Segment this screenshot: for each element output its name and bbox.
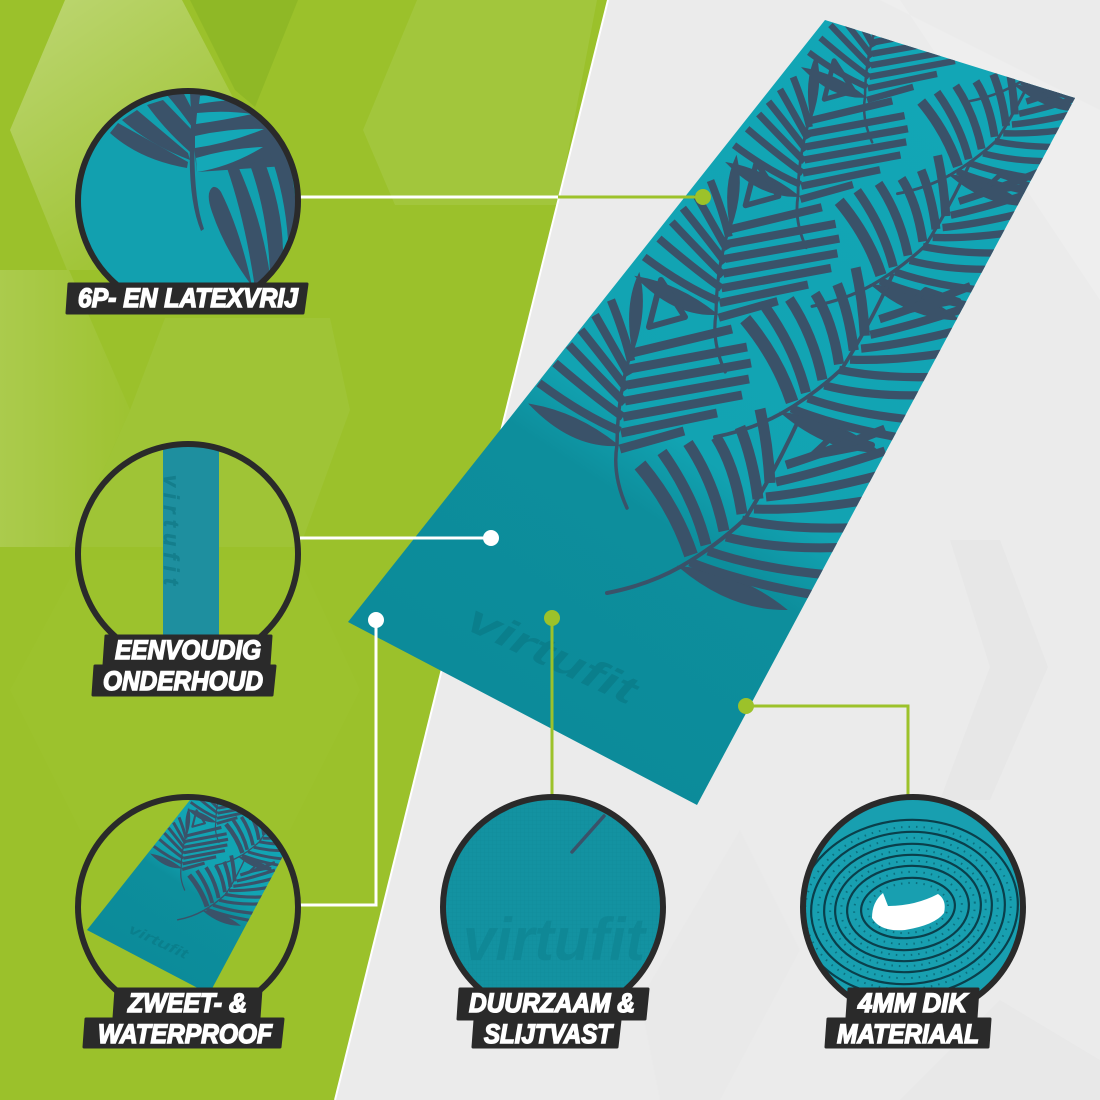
label: [458, 988, 648, 1049]
background: green panel: [0, 0, 608, 1100]
label: WATERPROOF: [98, 1019, 273, 1049]
label: [826, 988, 990, 1049]
circle: rolled mat side view: virtufit: [159, 475, 182, 586]
label: MATERIAAL: [837, 1019, 979, 1049]
connector: easy maintenance: [300, 530, 499, 546]
label: EENVOUDIG: [115, 635, 261, 665]
circle: miniature mat: [75, 794, 301, 993]
connector: thickness: [738, 698, 908, 798]
circle: mat texture with logo: virtufit: [463, 906, 648, 973]
feature: 6P- en latexvrij: [67, 91, 307, 313]
connector: waterproof: [300, 612, 384, 905]
connector: durable: [544, 610, 560, 798]
label: ZWEET- &: [127, 988, 247, 1018]
label: [93, 635, 275, 696]
label: 6P- EN LATEXVRIJ: [78, 283, 299, 313]
connector: latex free: [300, 189, 711, 205]
label: ONDERHOUD: [103, 666, 263, 696]
feature: duurzaam en slijtvast: [440, 790, 670, 1049]
label: [84, 988, 283, 1049]
label: SLIJTVAST: [484, 1019, 614, 1049]
yoga mat with palm leaf print: [348, 0, 1100, 805]
label: DUURZAAM &: [469, 988, 635, 1018]
circle: rolled mat side view: [75, 441, 301, 634]
label: 4MM DIK: [857, 988, 969, 1018]
circle: rolled mat end: [800, 794, 1026, 999]
circle: mat texture with logo: [440, 794, 666, 988]
feature: zweet- en waterproof: [75, 794, 301, 1048]
feature: 4mm dik materiaal: [791, 797, 1025, 1049]
feature: eenvoudig onderhoud: [78, 440, 298, 696]
circle: leaf close-up: [78, 91, 300, 311]
